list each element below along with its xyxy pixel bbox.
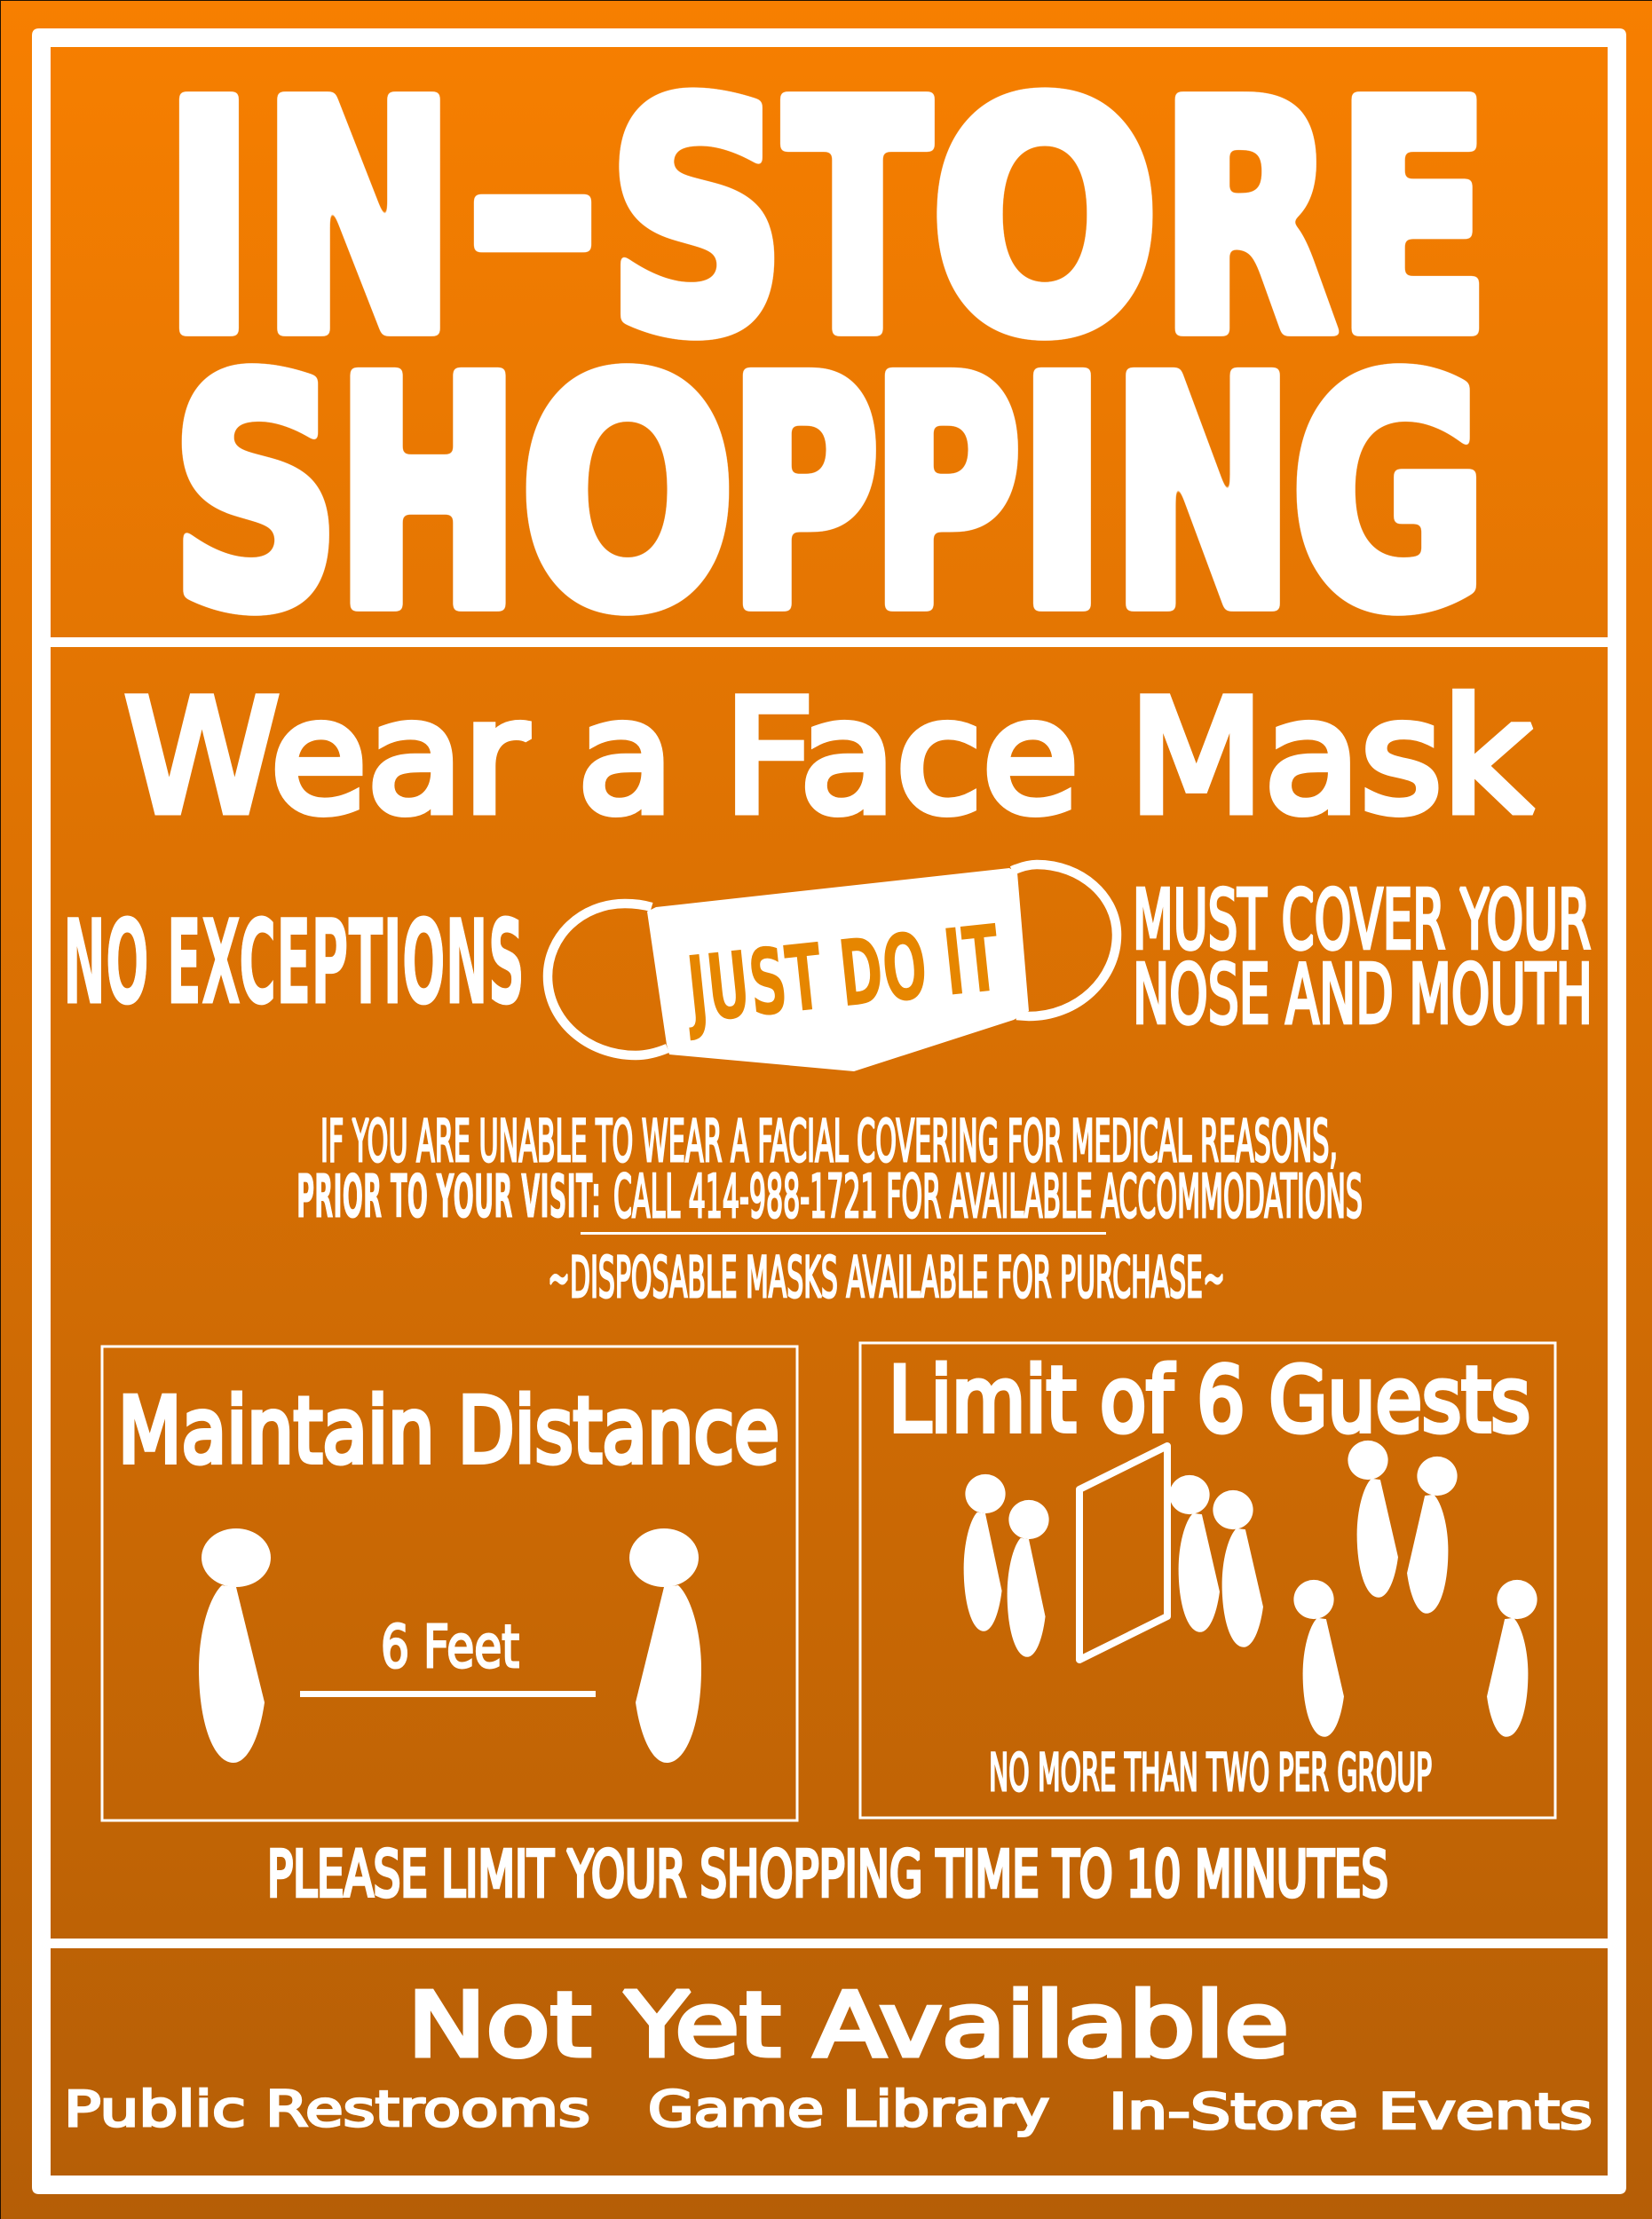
medical accommodations notice: [296, 1109, 1363, 1235]
unavailable list: Game Library: [648, 2081, 1049, 2137]
text: must cover your nose and mouth: [1133, 873, 1593, 1042]
title: IN-STORE SHOPPING: I: [162, 38, 256, 403]
title: IN-STORE SHOPPING: R: [1159, 37, 1337, 403]
panel heading: Limit of 6 Guests: [889, 1347, 1530, 1452]
title: IN-STORE SHOPPING: T: [785, 38, 931, 403]
heading: not yet available: Not Yet Available: [407, 1973, 1289, 2077]
title: IN-STORE SHOPPING: P: [871, 313, 1022, 678]
unavailable list: Public Restrooms: [64, 2081, 590, 2137]
panel: maintain distance: [102, 1346, 797, 1820]
distance line: [300, 1691, 596, 1697]
title: IN-STORE SHOPPING: -: [464, 30, 601, 383]
heading: Wear a Face Mask: Wear a Face Mask: [124, 667, 1533, 849]
title: IN-STORE SHOPPING: H: [336, 313, 520, 678]
distance label: 6 Feet: [381, 1613, 519, 1681]
icon: door: [1079, 1446, 1167, 1660]
title: IN-STORE SHOPPING: I: [1017, 313, 1107, 678]
title: IN-STORE SHOPPING: E: [1337, 36, 1490, 403]
title: IN-STORE SHOPPING: O: [519, 313, 736, 678]
title: IN-STORE SHOPPING: S: [607, 38, 786, 403]
icon: face mask: [548, 865, 1117, 1071]
title: IN-STORE SHOPPING: P: [729, 313, 880, 678]
title: IN-STORE SHOPPING: N: [262, 37, 455, 403]
medical accommodations notice: PRIOR TO YOUR VISIT:: [296, 1162, 601, 1231]
panel: limit of guests: [860, 1343, 1555, 1818]
title: IN-STORE SHOPPING: G: [1291, 314, 1488, 678]
unavailable list: In-Store Events: [1109, 2083, 1593, 2140]
title: IN-STORE SHOPPING: S: [170, 312, 341, 678]
icons: guests: [964, 1441, 1537, 1737]
unavailable list: [64, 2081, 1593, 2140]
title: IN-STORE SHOPPING: [162, 30, 1490, 678]
mask slogan: JUST DO IT: [680, 905, 1005, 1045]
title: IN-STORE SHOPPING: N: [1111, 312, 1294, 677]
title: IN-STORE SHOPPING: O: [930, 37, 1159, 403]
panel heading: Maintain Distance: [118, 1378, 779, 1484]
poster: NO EXCEPTIONS: [63, 895, 525, 1031]
icon: left person: [199, 1528, 271, 1763]
icon: right person: [629, 1528, 701, 1763]
